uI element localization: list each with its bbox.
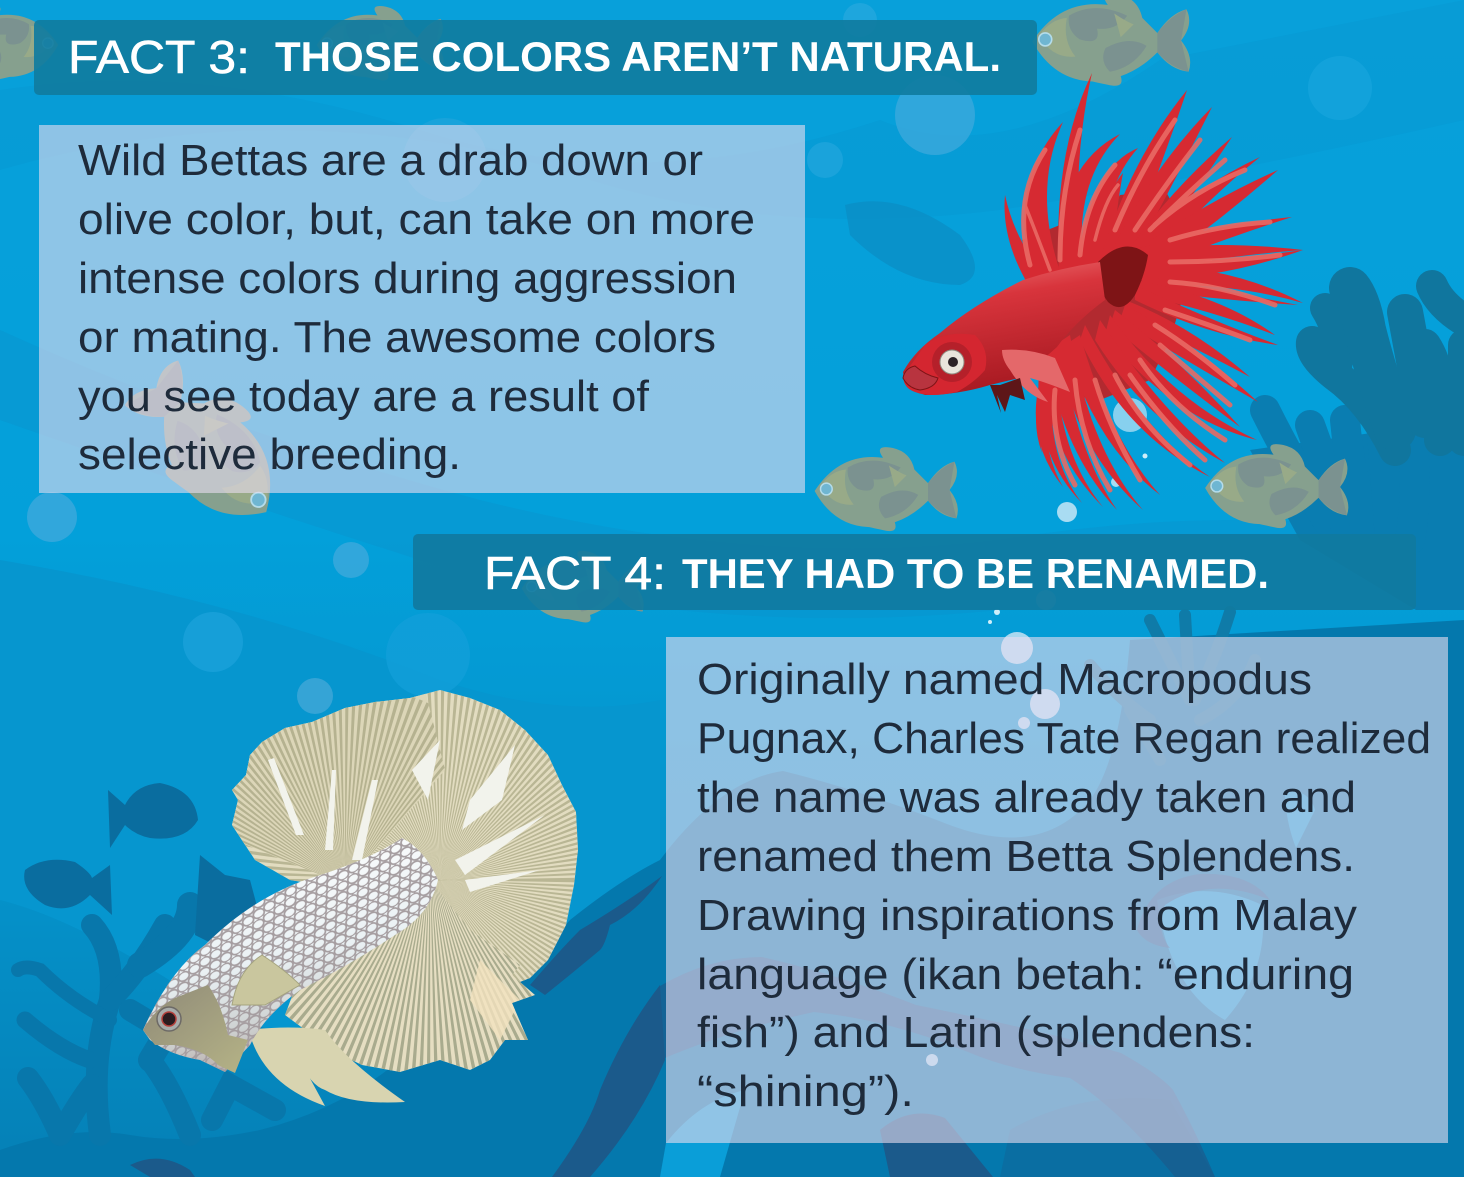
red lips (903, 366, 938, 390)
text panel: fact 3: or mating. The awesome colors (78, 313, 716, 362)
olive fish: top right (1032, 0, 1190, 86)
pale pectoral fin (232, 955, 300, 1005)
text panel: fact 4: Drawing inspirations from Malay (697, 891, 1357, 940)
olive fish: right (1205, 444, 1348, 528)
text panel: fact 3: intense colors during aggression (78, 254, 737, 303)
pale anal fin (285, 888, 535, 1072)
text panel: fact 4 (666, 637, 1448, 1143)
coral silhouette: panel 4 top (1090, 612, 1255, 760)
text panel: fact 3: selective breeding. (78, 430, 461, 479)
pale tail fan (232, 690, 578, 982)
illustration: red crowntail betta (903, 73, 1303, 510)
text panel: fact 4: “shining”). (697, 1067, 914, 1116)
pale body (143, 838, 438, 1072)
upper coral mass (1312, 286, 1464, 450)
red ventral fin (990, 378, 1025, 413)
red fin dark centre (1097, 246, 1148, 307)
red head (903, 334, 986, 395)
red fin highlights (1024, 120, 1280, 490)
red fin rays (1004, 73, 1303, 510)
heading bar: fact 3: FACT 3: (68, 31, 250, 83)
background: dark kelp shapes (130, 874, 1270, 1177)
red eye (932, 342, 972, 382)
heading bar: fact 4 (413, 534, 1416, 610)
red fin base (1022, 190, 1190, 400)
text panel: fact 3: Wild Bettas are a drab down or (78, 136, 703, 185)
heading bar: fact 4: THEY HAD TO BE RENAMED. (682, 550, 1269, 597)
text panel: fact 4: Originally named Macropodus (697, 655, 1312, 704)
olive fish: behind panel (112, 345, 306, 545)
lower coral mass (1250, 410, 1464, 610)
heading bar: fact 4: FACT 4: (484, 547, 666, 599)
text panel: fact 4: fish”) and Latin (splendens: (697, 1008, 1255, 1057)
silhouette fish: lower left (24, 783, 262, 950)
heading bar: fact 3 (34, 20, 1037, 95)
text panel: fact 4: language (ikan betah: “enduring (697, 950, 1354, 999)
text panel: fact 3 (39, 125, 805, 493)
text panel: fact 3: olive color, but, can take on more (78, 195, 755, 244)
olive fish: top left (0, 6, 58, 80)
text panel: fact 4: the name was already taken and (697, 773, 1356, 822)
red body (903, 262, 1105, 395)
pale ventral fin (248, 1028, 405, 1106)
text panel: fact 3: you see today are a result of (78, 372, 650, 421)
pale head (143, 985, 248, 1073)
coral silhouette: lower left (18, 905, 275, 1135)
olive fish: behind fact 4 bar (522, 551, 644, 622)
coral silhouette: right (1250, 286, 1464, 610)
olive fish: centre (815, 447, 958, 531)
red pectoral fin (1002, 350, 1070, 402)
pale eye (157, 1007, 181, 1031)
text panel: fact 4: renamed them Betta Splendens. (697, 832, 1355, 881)
heading bar: fact 3: THOSE COLORS AREN’T NATURAL. (275, 33, 1001, 80)
text panel: fact 4: Pugnax, Charles Tate Regan realized (697, 714, 1431, 763)
olive fish: top centre (317, 6, 444, 80)
illustration: pale halfmoon betta (143, 680, 590, 1106)
